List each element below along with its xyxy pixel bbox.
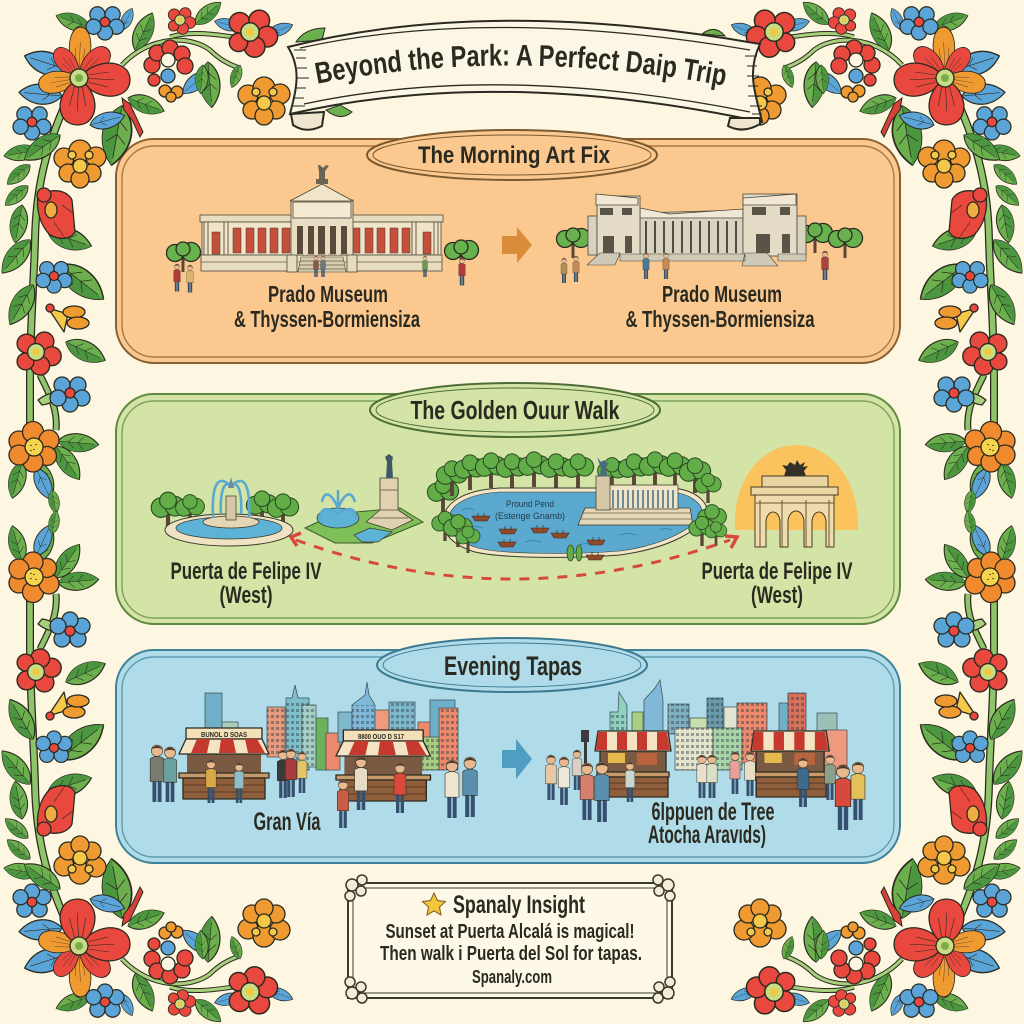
blue leaves behind big flower xyxy=(18,45,127,133)
text: gippuen de tree: Atocha Aravıds) xyxy=(648,821,766,849)
flower: red bud top xyxy=(168,8,196,34)
flower: blue lower xyxy=(36,262,72,293)
callout body: Spanaly.com xyxy=(472,967,552,987)
text: pond label xyxy=(495,499,565,522)
text: gippuen de tree xyxy=(648,798,775,849)
flower: red xyxy=(17,332,61,375)
flower: red left xyxy=(37,188,75,238)
flower: red top xyxy=(229,10,278,57)
text: prado museum right: & Thyssen-Bormiensiza xyxy=(626,306,815,332)
text: prado museum left: Prado Museum xyxy=(268,281,388,307)
stall left 1: BUNOL D SOAS xyxy=(201,730,247,739)
text: prado museum left xyxy=(234,281,420,332)
text: puerta de felipe left: (West) xyxy=(220,582,272,609)
floral border: top-left quadrant xyxy=(0,0,295,515)
icon: star xyxy=(422,893,446,915)
title banner xyxy=(286,20,764,131)
stall left 1 xyxy=(179,728,269,799)
text: prado museum right: Prado Museum xyxy=(662,281,782,307)
callout heading: Spanaly Insight xyxy=(453,891,585,919)
red buds xyxy=(122,98,143,137)
city skyline right xyxy=(610,680,847,774)
floral border: bottom-right quadrant xyxy=(729,509,1024,1024)
heading: evening tapas xyxy=(377,638,647,692)
fountain and monument xyxy=(305,454,423,543)
heading: the golden walk xyxy=(370,383,660,437)
callout body xyxy=(380,921,642,987)
museum illustration 1 xyxy=(166,165,478,292)
flower: orange left xyxy=(54,140,106,188)
flower: yellow xyxy=(46,304,89,332)
leaves: top arc xyxy=(53,0,295,168)
stall right 1 xyxy=(595,731,671,797)
heading: evening tapas: Evening Tapas xyxy=(444,651,582,681)
vines xyxy=(30,33,240,430)
arrow: orange xyxy=(502,227,532,263)
flower: orange top xyxy=(238,77,290,125)
text: puerta de felipe right: Puerta de Felipe IV xyxy=(702,558,852,585)
text: prado museum right xyxy=(626,281,815,332)
stall left 2 xyxy=(336,730,430,801)
city skyline left xyxy=(205,682,458,770)
floral border: top-right quadrant xyxy=(729,0,1024,515)
stall left 2: 8800 OUO D S17 xyxy=(358,732,404,741)
title text: Beyond the Park: A Perfect Daip Trip xyxy=(314,44,726,90)
stall right 2 xyxy=(751,731,829,797)
heading: the morning art fix xyxy=(367,130,657,180)
panel: evening tapas xyxy=(116,638,900,863)
callout: spanaly insight xyxy=(345,875,675,1003)
heading: the morning art fix: The Morning Art Fix xyxy=(418,142,611,169)
flower: blue left xyxy=(13,107,51,140)
arrow: dashed route xyxy=(291,533,737,579)
leaves: left column xyxy=(0,127,111,515)
text: puerta de felipe left: Puerta de Felipe IV xyxy=(170,558,322,585)
lamp post xyxy=(581,730,589,764)
text: puerta de felipe right: (West) xyxy=(751,582,803,609)
fountain 1 xyxy=(151,477,299,546)
people left xyxy=(150,745,477,828)
text: puerta de felipe left xyxy=(170,558,322,609)
flower: ring xyxy=(144,40,193,102)
panel: the morning art fix xyxy=(116,130,900,363)
text: pond label: Pround Pend xyxy=(506,499,554,510)
museum illustration 2 xyxy=(556,194,862,283)
people right xyxy=(546,750,865,830)
heading: the golden walk: The Golden Ouur Walk xyxy=(410,395,620,425)
text: puerta de felipe right xyxy=(702,558,852,609)
flower: orange xyxy=(9,422,59,472)
floral border: bottom-left quadrant xyxy=(0,509,295,1024)
text: pond label: (Estenge Gnamb) xyxy=(495,511,565,522)
callout body: Sunset at Puerta Alcalá is magical! xyxy=(386,921,634,943)
flower: blue xyxy=(50,377,90,412)
flower: blue top xyxy=(86,7,124,40)
panel: the golden hour walk xyxy=(116,383,900,624)
callout body: Then walk i Puerta del Sol for tapas. xyxy=(380,943,642,965)
icon: big flower xyxy=(37,27,131,126)
lake with colonnade and boats xyxy=(427,452,727,561)
text: gran via: Gran Vía xyxy=(254,808,321,836)
arrow: blue xyxy=(502,739,532,779)
text: gippuen de tree: 6lppuen de Tree xyxy=(652,798,775,826)
arch with sunset xyxy=(735,445,858,547)
text: prado museum left: & Thyssen-Bormiensiza xyxy=(234,306,420,332)
